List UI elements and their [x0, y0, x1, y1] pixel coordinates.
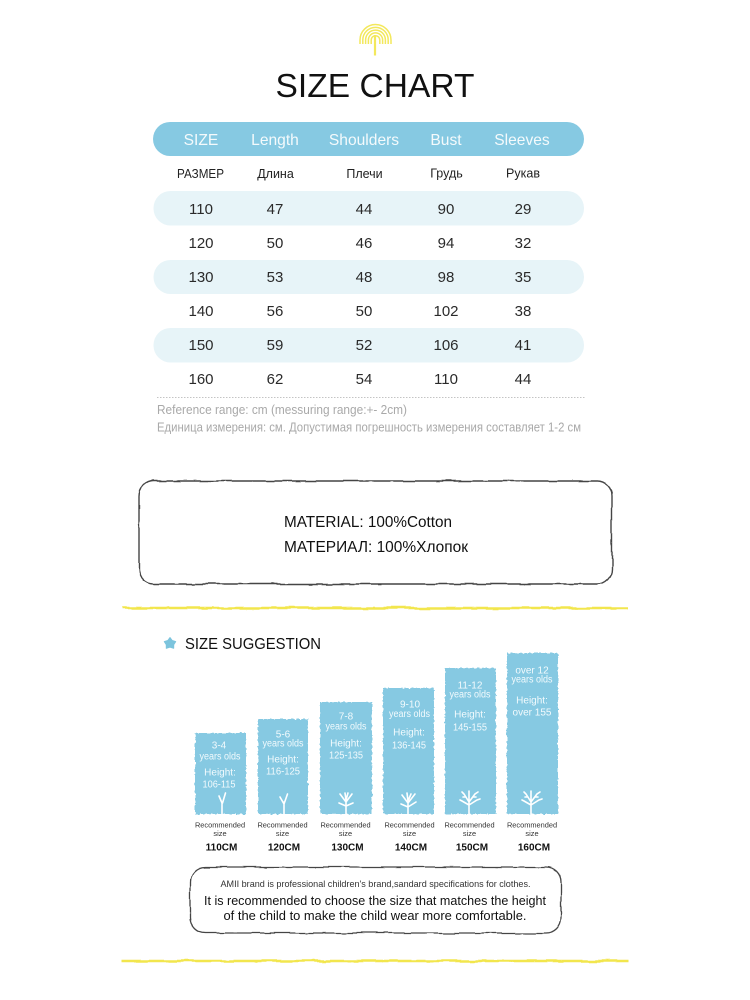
table header bar: SIZE — [184, 132, 218, 149]
material text: МАТЕРИАЛ: 100%Хлопок — [284, 539, 468, 556]
russian column headings: Рукав — [506, 166, 540, 180]
bar 130: size — [339, 829, 352, 838]
bar 110: 3-4 — [212, 740, 227, 752]
icon: blue star — [164, 638, 176, 648]
bar 160: over 12 — [515, 666, 549, 676]
bar 150: size — [463, 829, 476, 838]
bar 160: Recommended — [507, 820, 557, 830]
table header bar: Sleeves — [494, 132, 550, 149]
bar 160: size — [525, 829, 539, 838]
row 160 — [188, 371, 531, 388]
bar 140: 136-145 — [392, 740, 426, 752]
row 130: 130 — [188, 269, 214, 286]
measurement note — [157, 403, 581, 434]
row 150 — [154, 328, 584, 362]
material hand-drawn frame — [139, 481, 612, 584]
panel: brand recommendation — [190, 867, 561, 933]
russian column headings: Плечи — [346, 167, 383, 181]
row 120 — [188, 235, 531, 252]
bar 120 — [257, 719, 308, 854]
bar 150: Height: — [454, 710, 486, 720]
bar 120: 5-6 — [276, 730, 291, 740]
row 150: 41 — [515, 337, 531, 354]
bar 120: Height: — [267, 754, 299, 766]
row 130 — [154, 260, 584, 294]
russian column headings: Длина — [257, 167, 294, 181]
bar 120: 116-125 — [266, 766, 300, 778]
row 130: 48 — [356, 269, 372, 286]
bar 150 — [444, 668, 496, 854]
icon: full tree — [460, 791, 480, 814]
recommendation text: AMII brand is professional children's brand,sandard specifications for clothes. — [220, 879, 530, 890]
bar 120: years olds — [262, 738, 304, 750]
icon: sapling — [280, 794, 288, 814]
bar 110: size — [213, 829, 227, 838]
panel: size table — [153, 122, 584, 388]
bar 150: 11-12 — [458, 680, 483, 692]
row 110: 90 — [438, 201, 454, 218]
bar 110: years olds — [200, 752, 240, 762]
divider: yellow wavy line — [122, 607, 628, 609]
russian column headings: РАЗМЕР — [177, 167, 224, 181]
row 140: 50 — [356, 303, 372, 320]
row 140: 38 — [515, 303, 531, 320]
row 160: 62 — [267, 371, 283, 388]
chart: recommended size by height — [195, 653, 558, 854]
icon: young tree — [401, 793, 416, 814]
recommendation text — [204, 879, 547, 923]
bar 140: Height: — [393, 728, 425, 738]
row 120: 32 — [515, 235, 531, 252]
icon: young tree — [339, 793, 353, 814]
row 150: 59 — [267, 337, 283, 354]
section heading: size suggestion — [164, 636, 321, 653]
row 160: 160 — [188, 371, 214, 388]
bar 150: Recommended — [444, 820, 495, 830]
row 110: 29 — [515, 201, 531, 218]
bar 150: 145-155 — [453, 722, 487, 734]
bar 140: Recommended — [384, 820, 435, 830]
title: SIZE CHART — [276, 68, 474, 105]
bar 130: 130CM — [331, 842, 364, 854]
icon: sapling — [219, 793, 226, 814]
row 110: 44 — [356, 201, 372, 218]
row 120: 50 — [267, 235, 283, 252]
material text: MATERIAL: 100%Cotton — [284, 514, 452, 531]
recommendation hand-drawn frame — [190, 867, 561, 933]
row 120: 46 — [356, 235, 372, 252]
bar 110 — [195, 733, 246, 854]
icon: yellow arch tree — [360, 24, 391, 56]
bar 130: years olds — [326, 722, 366, 732]
bar 130: Recommended — [320, 820, 371, 830]
row 140: 56 — [267, 303, 283, 320]
row 140: 140 — [188, 303, 214, 320]
bar 140: 140CM — [395, 842, 427, 854]
bar 120: size — [276, 829, 289, 838]
row 150: 106 — [433, 337, 459, 354]
bar 150: years olds — [450, 690, 490, 700]
recommendation text: of the child to make the child wear more comfortable. — [224, 909, 526, 923]
bar 160: years olds — [512, 674, 552, 686]
row 110: 110 — [189, 201, 213, 218]
bar 110: 106-115 — [202, 780, 236, 790]
panel: material — [139, 481, 612, 584]
divider: yellow wavy line — [122, 960, 628, 962]
row 150: 150 — [188, 337, 214, 354]
russian column headings — [177, 166, 540, 181]
measurement note: Единица измерения: см. Допустимая погрешность измерения составляет 1-2 см — [157, 420, 581, 434]
bar 160: 160CM — [518, 842, 550, 854]
bar 140: 9-10 — [400, 700, 420, 710]
bar 160: Height: — [516, 696, 548, 706]
row 120: 120 — [188, 235, 214, 252]
row 160: 54 — [356, 371, 372, 388]
bar 130 — [320, 702, 372, 854]
bar 140: size — [403, 829, 416, 838]
row 110 — [154, 191, 584, 226]
table header bar: Length — [251, 132, 299, 149]
bar 110: Height: — [204, 768, 236, 778]
material text — [284, 514, 468, 556]
bar 150: 150CM — [456, 842, 488, 854]
bar 140 — [383, 688, 435, 854]
table header bar: Bust — [430, 132, 462, 149]
russian column headings: Грудь — [430, 166, 463, 180]
bar 160: over 155 — [513, 708, 552, 718]
recommendation text: It is recommended to choose the size that matches the height — [204, 894, 547, 908]
row 120: 94 — [438, 235, 454, 252]
bar 140: years olds — [389, 709, 430, 720]
row 110: 47 — [267, 201, 283, 218]
bar 120: Recommended — [257, 820, 308, 830]
row 160: 110 — [434, 371, 458, 388]
bar 160 — [507, 653, 558, 854]
row 130: 98 — [438, 269, 454, 286]
row 150: 52 — [356, 337, 372, 354]
measurement note: Reference range: cm (messuring range:+- 2cm) — [157, 403, 407, 417]
table header bar: Shoulders — [329, 132, 399, 149]
heading text: SIZE SUGGESTION — [185, 636, 321, 653]
row 130: 35 — [515, 269, 531, 286]
bar 120: 120CM — [268, 842, 300, 854]
row 140 — [188, 303, 531, 320]
row 160: 44 — [515, 371, 531, 388]
bar 130: Height: — [330, 738, 362, 750]
row 140: 102 — [433, 303, 459, 320]
table header bar — [153, 122, 584, 156]
row 130: 53 — [267, 269, 283, 286]
bar 110: 110CM — [206, 842, 237, 854]
icon: full tree — [522, 791, 542, 814]
bar 130: 7-8 — [339, 712, 354, 722]
bar 130: 125-135 — [329, 750, 363, 762]
bar 110: Recommended — [195, 820, 245, 830]
